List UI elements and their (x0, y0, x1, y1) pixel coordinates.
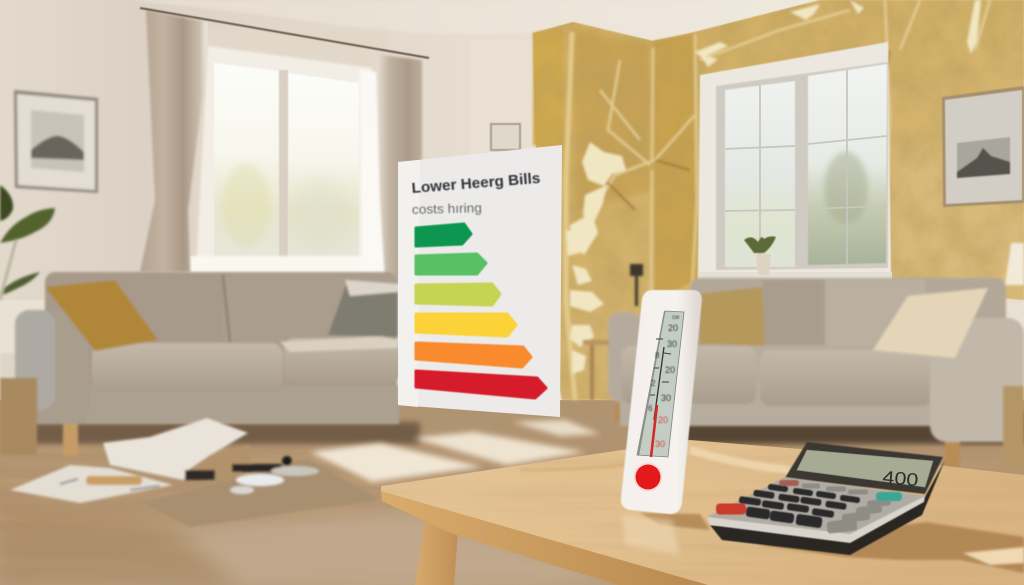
thermometer: 20 (658, 415, 668, 425)
calculator (707, 442, 945, 555)
thermometer: 30 (655, 439, 665, 449)
thermometer (621, 290, 702, 514)
thermometer: 30 (667, 339, 677, 349)
floor light patches (310, 420, 600, 482)
energy bars (416, 224, 546, 398)
right sofa (608, 243, 1024, 468)
thermometer: 30 (661, 393, 671, 403)
right window (698, 42, 892, 280)
thermometer: 20 (668, 323, 678, 333)
plant (0, 185, 55, 379)
thermometer: 8 (655, 351, 660, 360)
poster subtitle: costs hıring (412, 200, 482, 217)
wall art: small frame (491, 124, 520, 150)
left window with curtains (140, 8, 429, 285)
table shadow (760, 522, 1024, 573)
coffee table (380, 438, 1024, 585)
calculator: 400 (882, 467, 919, 490)
thermometer: 20 (665, 365, 675, 375)
energy label poster (398, 145, 562, 417)
thermometer: 2 (651, 379, 656, 388)
wall art: right frame (942, 86, 1024, 207)
rug with clutter (10, 418, 380, 527)
left sofa (15, 272, 400, 456)
wall art: left frame (14, 90, 98, 193)
thermometer scale: cw (672, 315, 680, 321)
calculator keys (716, 480, 902, 534)
side table and socket (583, 264, 643, 400)
poster title: Lower Heerg Bills (411, 170, 541, 197)
thermometer: 6 (648, 404, 653, 413)
insulated wall (530, 0, 1024, 400)
wicker basket left (0, 378, 37, 455)
